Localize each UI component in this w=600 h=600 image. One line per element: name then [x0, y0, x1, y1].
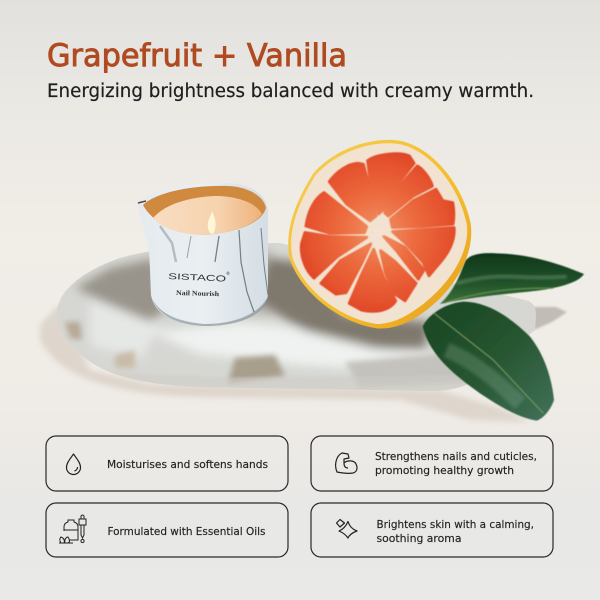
leaf: lower	[423, 302, 554, 421]
title: Grapefruit + Vanilla	[47, 38, 347, 74]
brand label: SISTACO	[168, 271, 227, 284]
icon: oil bottle and dropper	[59, 515, 86, 543]
marble slab	[57, 243, 536, 395]
text: brightens: Brightens skin with a calming,	[376, 519, 534, 531]
text: moisturises: Moisturises and softens hands	[107, 459, 268, 471]
leaf: upper	[440, 253, 584, 304]
candle tin	[137, 183, 268, 326]
cast shadow on table	[40, 305, 567, 422]
text: strengthens: Strengthens nails and cuticles,	[375, 451, 537, 463]
marble veins	[160, 226, 268, 312]
panel: essential oils	[46, 503, 288, 557]
text: strengthens: promoting healthy growth	[375, 465, 514, 477]
flesh segments	[301, 154, 454, 311]
core	[369, 225, 386, 245]
subtitle: Energizing brightness balanced with creamy warmth.	[47, 81, 534, 102]
tin interior	[143, 186, 266, 235]
wax surface	[153, 196, 262, 235]
brand label	[168, 271, 230, 298]
text: brightens	[376, 519, 534, 545]
grapefruit half	[288, 140, 471, 329]
panel: brightens	[311, 503, 553, 557]
brand label: Nail Nourish	[176, 289, 219, 298]
text: essential oils: Formulated with Essential Oils	[108, 526, 266, 538]
text: brightens: soothing aroma	[376, 533, 462, 545]
rind	[288, 140, 471, 329]
icon: sparkles	[336, 520, 357, 538]
flame	[208, 211, 216, 234]
text: strengthens	[375, 451, 537, 477]
photo: candle, grapefruit and leaves on marble slab	[40, 140, 584, 422]
brand label: ®	[226, 271, 230, 276]
panel: moisturises	[46, 436, 288, 491]
pith	[291, 143, 467, 324]
icon: water drop	[66, 454, 80, 475]
tin body	[137, 183, 268, 325]
icon: flexed arm	[336, 453, 357, 473]
panel: strengthens	[311, 436, 553, 491]
